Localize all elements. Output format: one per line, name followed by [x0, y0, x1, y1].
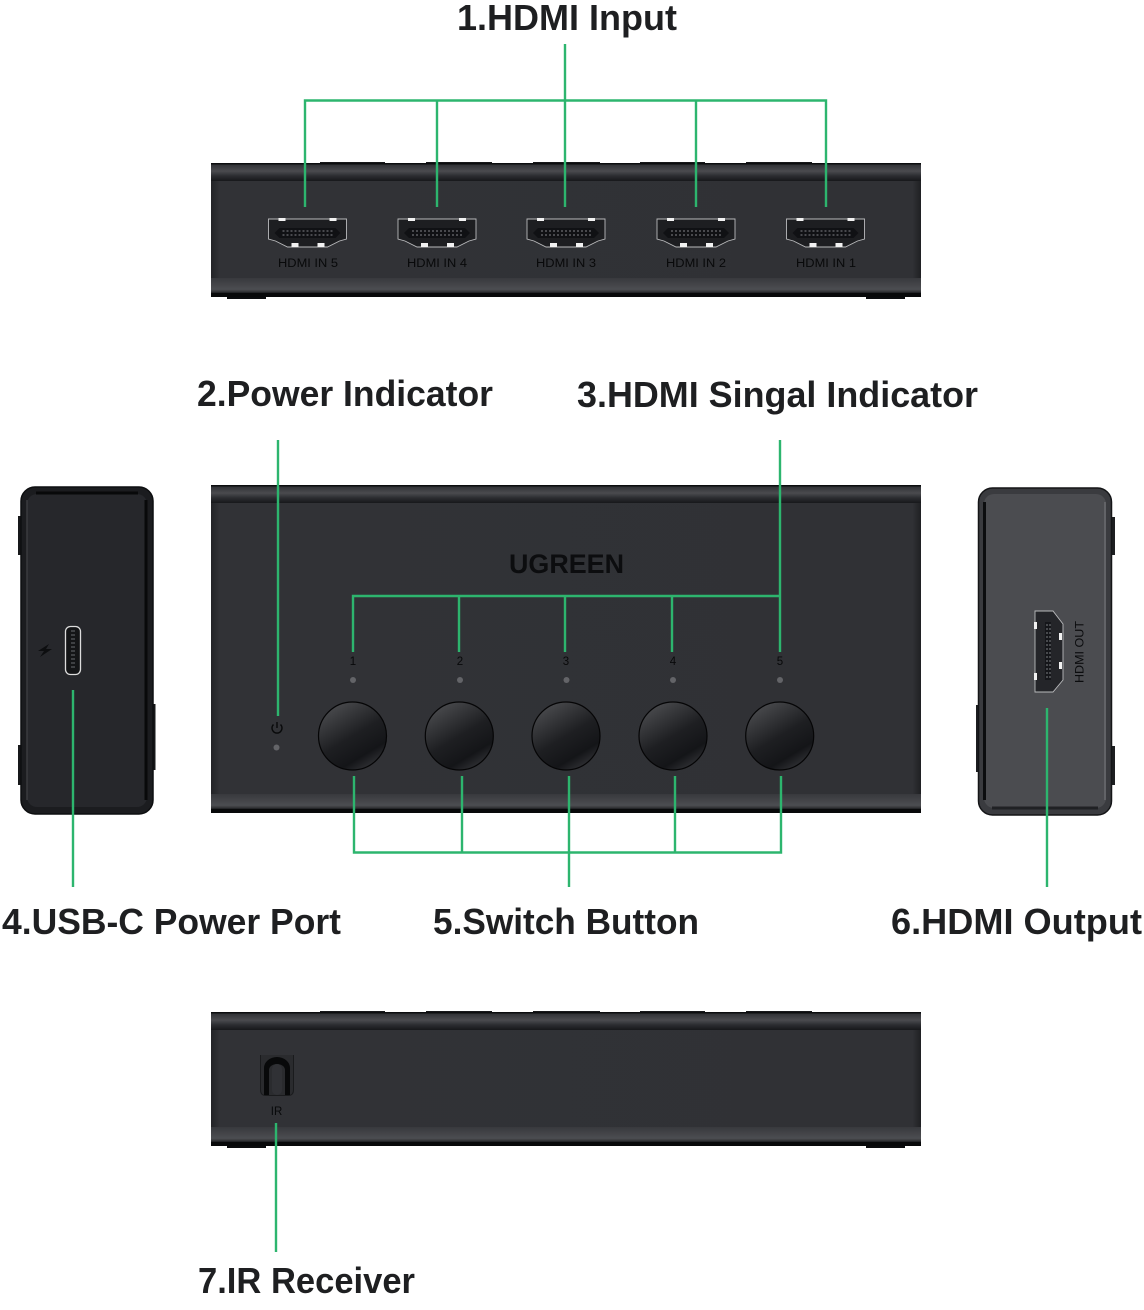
panel: left side view with USB-C port — [18, 487, 156, 814]
icon: HDMI IN 5 port: HDMI IN 5 — [278, 258, 338, 270]
button 5 — [746, 702, 814, 770]
icon: HDMI IN 1 port: HDMI IN 1 — [796, 258, 856, 270]
panel: rear view with HDMI inputs — [211, 162, 921, 299]
indicator 1 — [350, 656, 356, 683]
icon: HDMI IN 3 port: HDMI IN 3 — [536, 258, 596, 270]
label: IR: IR — [271, 1106, 282, 1118]
heading: 4.USB-C Power Port: 4.USB-C Power Port — [2, 901, 341, 942]
indicator 3: 3 — [563, 656, 569, 668]
indicator 1: 1 — [350, 656, 356, 668]
connector: signal indicator lines — [353, 440, 780, 652]
indicator 5 — [777, 656, 783, 683]
icon: power bolt — [38, 644, 52, 657]
panel: front view — [211, 485, 921, 813]
button 1 — [318, 702, 386, 770]
panel: right side view with HDMI output — [976, 488, 1115, 815]
indicator 4: 4 — [670, 656, 677, 668]
indicator 3 — [563, 656, 570, 683]
icon: HDMI IN 4 port: HDMI IN 4 — [407, 258, 468, 270]
heading: 3.HDMI Singal Indicator: 3.HDMI Singal Indicator — [577, 374, 978, 415]
heading: 5.Switch Button: 5.Switch Button — [433, 901, 699, 942]
button 2 — [425, 702, 493, 770]
indicator 2: 2 — [457, 656, 463, 668]
logo: UGREEN: UGREEN — [509, 549, 624, 579]
icon: IR receiver window — [260, 1055, 294, 1096]
connector: HDMI input lines — [305, 44, 826, 207]
heading: 7.IR Receiver: 7.IR Receiver — [198, 1260, 415, 1301]
icon: HDMI IN 2 port — [657, 218, 735, 270]
icon: HDMI output port — [1034, 611, 1063, 692]
icon: power symbol and LED — [272, 722, 282, 750]
icon: HDMI IN 2 port: HDMI IN 2 — [666, 258, 726, 270]
icon: HDMI IN 3 port — [527, 218, 605, 270]
panel: back view with IR receiver — [211, 1011, 921, 1148]
indicator 2 — [457, 656, 463, 683]
button 3 — [532, 702, 600, 770]
icon: HDMI IN 4 port — [398, 218, 476, 270]
indicator 5: 5 — [777, 656, 783, 668]
icon: HDMI IN 1 port — [786, 218, 864, 270]
connector: HDMI output line — [1046, 708, 1048, 887]
connector: USB-C line — [72, 690, 74, 887]
connector: IR receiver line — [275, 1123, 277, 1252]
heading: 6.HDMI Output: 6.HDMI Output — [891, 901, 1142, 942]
indicator 4 — [670, 656, 677, 683]
label: HDMI OUT: HDMI OUT — [1072, 620, 1086, 683]
icon: USB-C port — [66, 626, 80, 674]
connector: power indicator line — [277, 440, 279, 716]
connector: switch button lines — [354, 776, 781, 887]
button 4 — [639, 702, 707, 770]
heading: 2.Power Indicator: 2.Power Indicator — [197, 373, 493, 414]
icon: HDMI IN 5 port — [268, 218, 346, 270]
